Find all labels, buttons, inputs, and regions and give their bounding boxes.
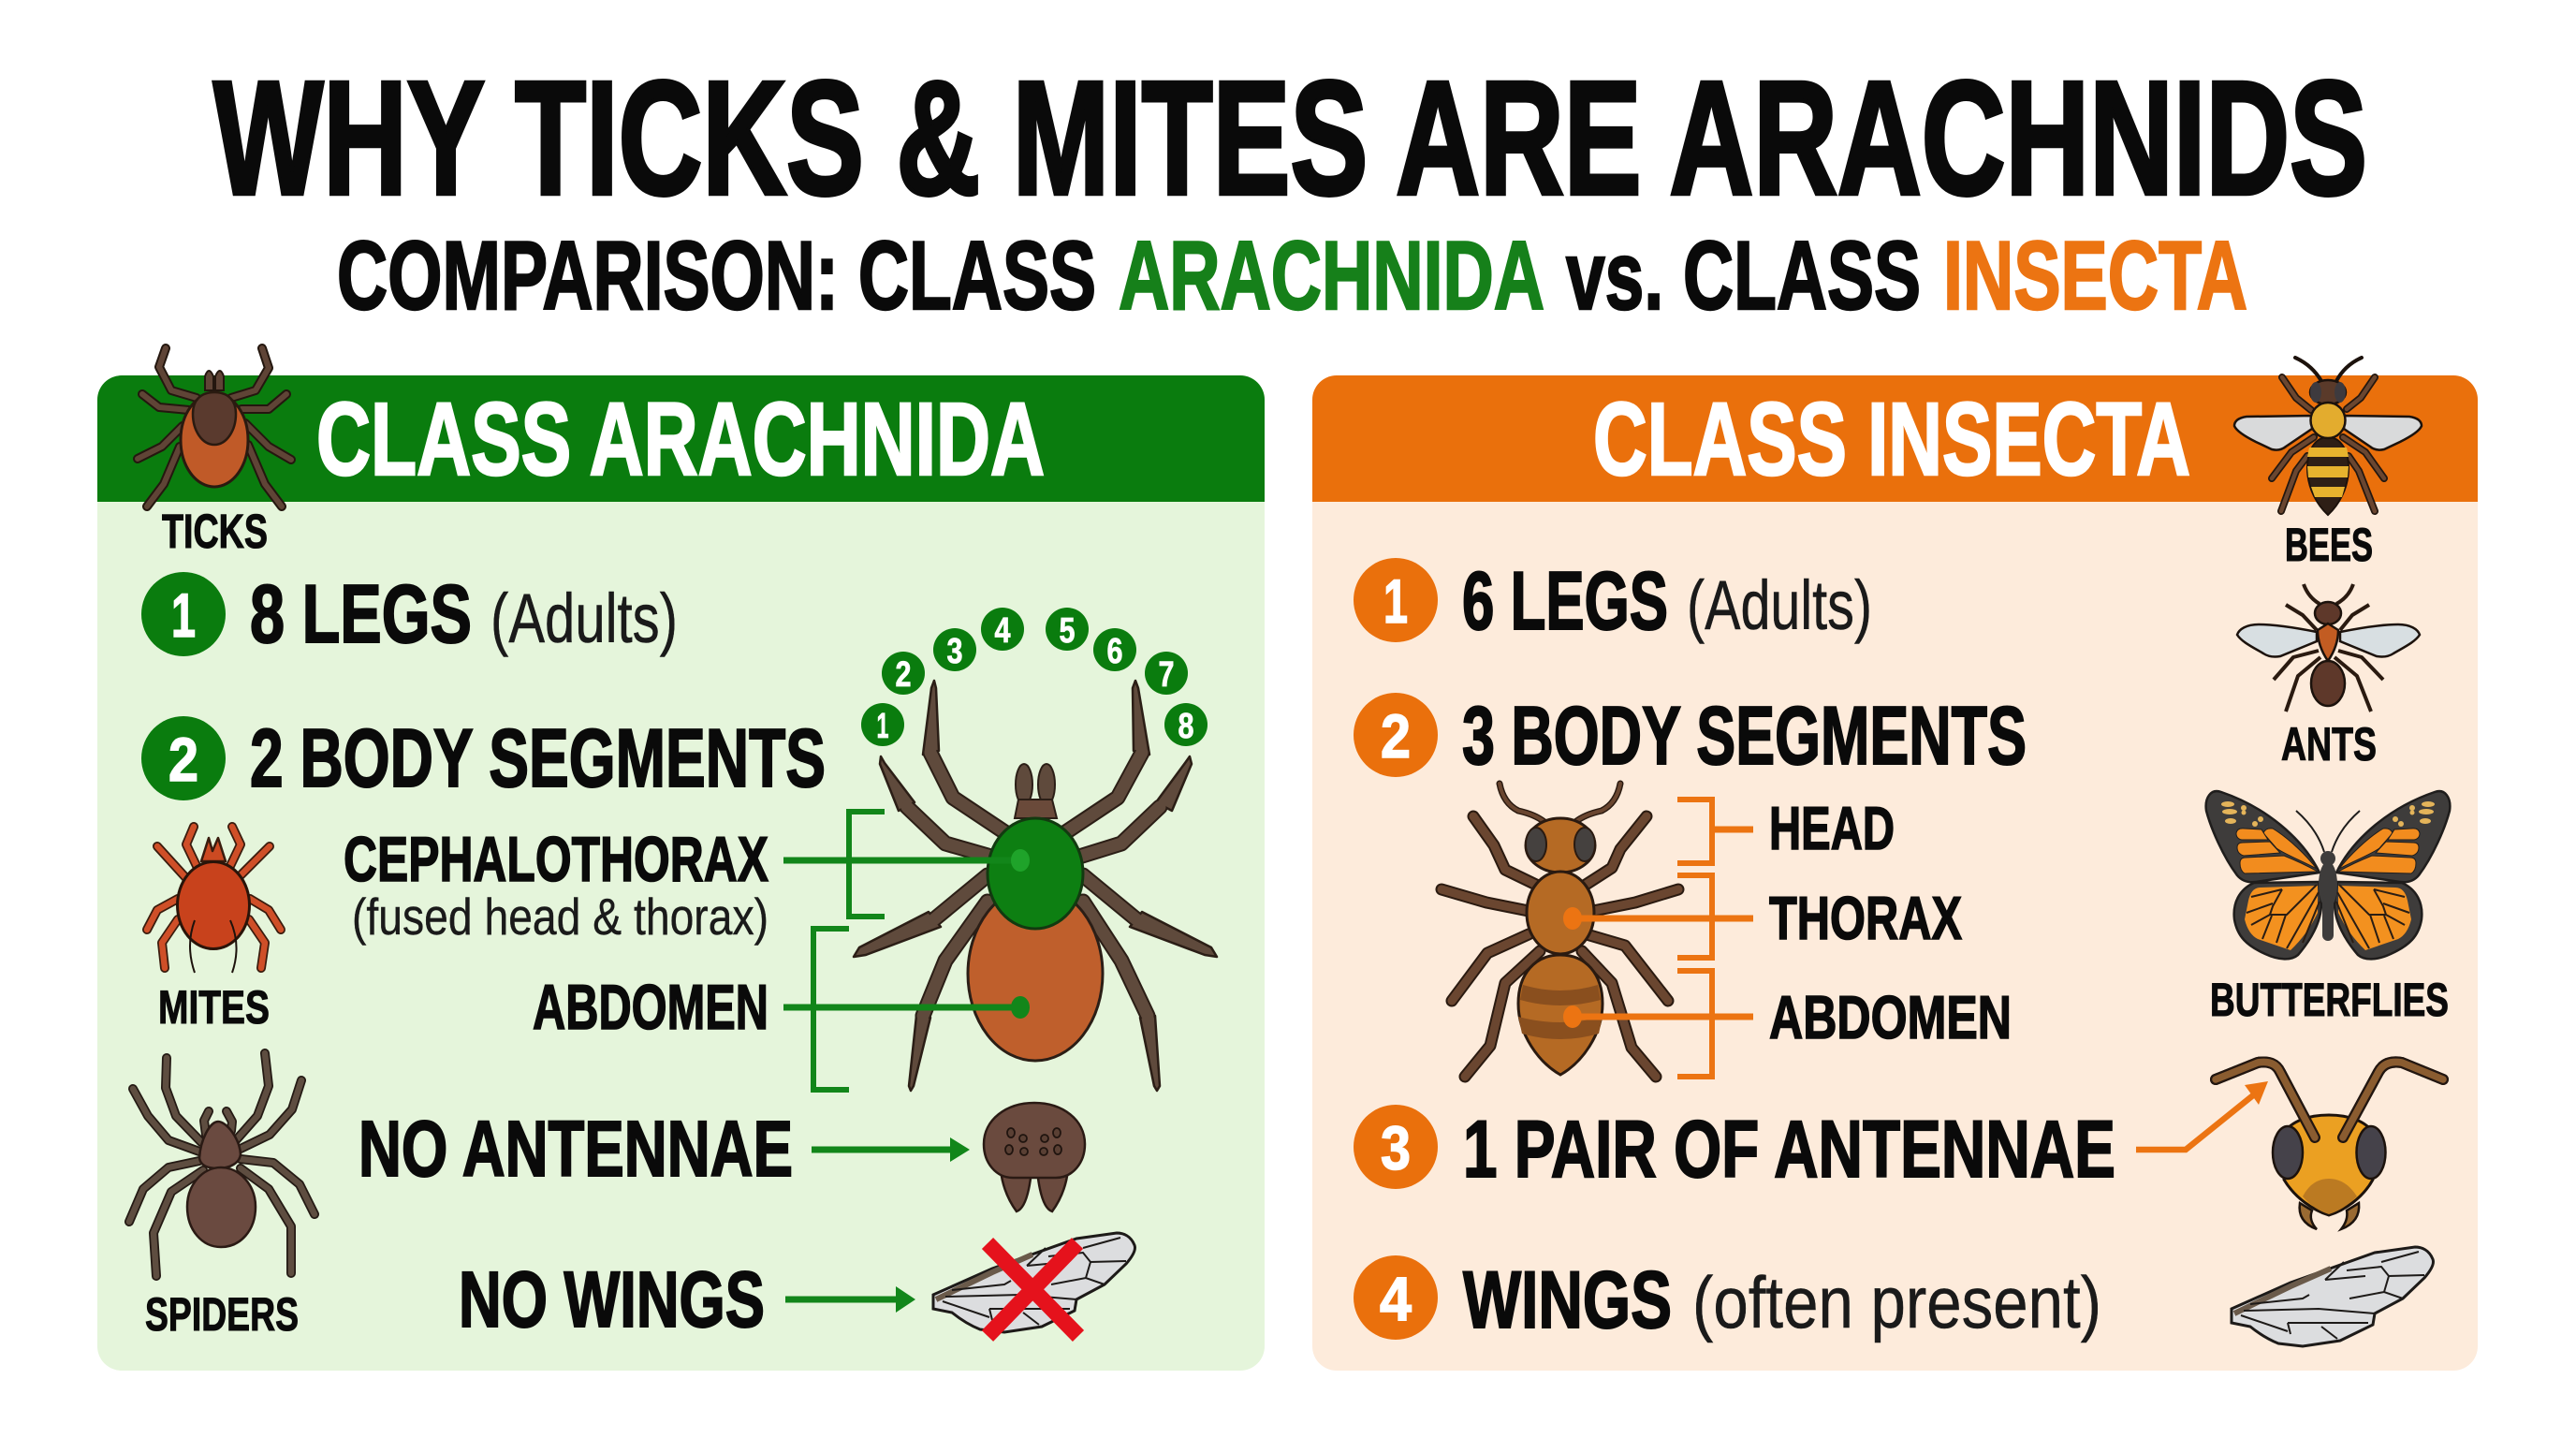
subtitle: vs. CLASS: [1566, 222, 1921, 330]
leg number badges: 6: [1106, 632, 1123, 671]
callout: cephalothorax: (fused head & thorax): [352, 888, 768, 946]
callout: thorax: [1563, 875, 1962, 958]
item: 8 legs: 8 LEGS: [250, 567, 472, 660]
icon: mite: [147, 827, 281, 973]
icon: large ant diagram: [1442, 784, 1678, 1077]
leg number badges: 1: [876, 707, 889, 746]
label: ants: ANTS: [2281, 718, 2377, 770]
item: 3 body segments: 3 BODY SEGMENTS: [1462, 689, 2027, 782]
item: 6 legs: 6 LEGS: [1462, 554, 1668, 647]
icon: winged ant: [2237, 584, 2420, 712]
panel header: [97, 375, 1265, 502]
header title: CLASS ARACHNIDA: [316, 382, 1045, 497]
leg number badges: 8: [1178, 707, 1194, 746]
subtitle: ARACHNIDA: [1119, 222, 1544, 330]
icon: bee: [2234, 358, 2422, 515]
icon: butterfly: [2206, 791, 2450, 959]
item: wings: [1354, 1255, 2101, 1345]
item: 1 pair of antennae: [1354, 1105, 2115, 1195]
item: 2 body segments: [141, 712, 826, 804]
item: 3 body segments: [1354, 689, 2027, 782]
subtitle: INSECTA: [1943, 222, 2247, 330]
leg number badges: 3: [947, 632, 962, 671]
leg number badges: 4: [994, 611, 1011, 651]
leg number badges: 5: [1060, 611, 1075, 651]
icon: spider: [129, 1053, 315, 1276]
item: no antennae: NO ANTENNAE: [359, 1105, 793, 1193]
panel: class insecta: [1312, 358, 2478, 1371]
callout: abdomen: ABDOMEN: [1769, 983, 2012, 1051]
item: 1 pair of antennae: 1 PAIR OF ANTENNAE: [1463, 1105, 2115, 1195]
item: wings: WINGS: [1463, 1255, 1672, 1345]
subtitle: COMPARISON: CLASS: [337, 222, 1096, 330]
item: 1 pair of antennae: 3: [1381, 1113, 1411, 1182]
item: 8 legs: [141, 567, 678, 660]
callout: cephalothorax: CEPHALOTHORAX: [344, 824, 768, 895]
icon: large tick diagram: [854, 681, 1217, 1091]
item: wings: (often present): [1692, 1261, 2101, 1343]
label: butterflies: BUTTERFLIES: [2210, 974, 2449, 1026]
item: 6 legs: (Adults): [1687, 566, 1872, 644]
callout: abdomen: [1563, 971, 2012, 1077]
label: mites: MITES: [158, 981, 270, 1034]
icon: crossed-out wing: [933, 1233, 1135, 1336]
subtitle: [337, 222, 2247, 330]
label: ticks: TICKS: [162, 505, 268, 558]
item: 2 body segments: 2: [168, 725, 198, 794]
item: no wings: NO WINGS: [459, 1255, 765, 1343]
item: wings: 4: [1380, 1264, 1412, 1333]
item: 8 legs: (Adults): [490, 580, 678, 657]
item: 6 legs: [1354, 554, 1872, 647]
callout: cephalothorax: [344, 812, 1030, 946]
callout: head: HEAD: [1769, 794, 1895, 862]
icon: insect wing: [2232, 1247, 2434, 1346]
callout: abdomen: [533, 929, 1030, 1090]
icon: insect head with antennae: [2216, 1062, 2443, 1229]
panel background: [1312, 375, 2478, 1371]
item: 8 legs: 1: [171, 580, 196, 650]
icon: tick small: [138, 348, 291, 506]
callout: abdomen: ABDOMEN: [533, 972, 768, 1043]
item: 3 body segments: 2: [1381, 701, 1411, 770]
header title: CLASS INSECTA: [1593, 382, 2190, 497]
panel: class arachnida: [97, 348, 1265, 1371]
callout: head: [1677, 794, 1895, 863]
label: spiders: SPIDERS: [145, 1288, 299, 1341]
callout: thorax: THORAX: [1769, 884, 1962, 952]
item: 2 body segments: 2 BODY SEGMENTS: [250, 712, 826, 804]
leg number badges: 7: [1159, 655, 1174, 695]
label: bees: BEES: [2285, 519, 2373, 571]
icon: spider head: [984, 1103, 1085, 1211]
panel header: [1312, 375, 2478, 502]
arrow: to antennae: [2136, 1081, 2268, 1150]
panel background: [97, 375, 1265, 1371]
leg number badges: [861, 608, 1208, 746]
item: 6 legs: 1: [1383, 566, 1408, 636]
leg number badges: 2: [895, 655, 912, 695]
